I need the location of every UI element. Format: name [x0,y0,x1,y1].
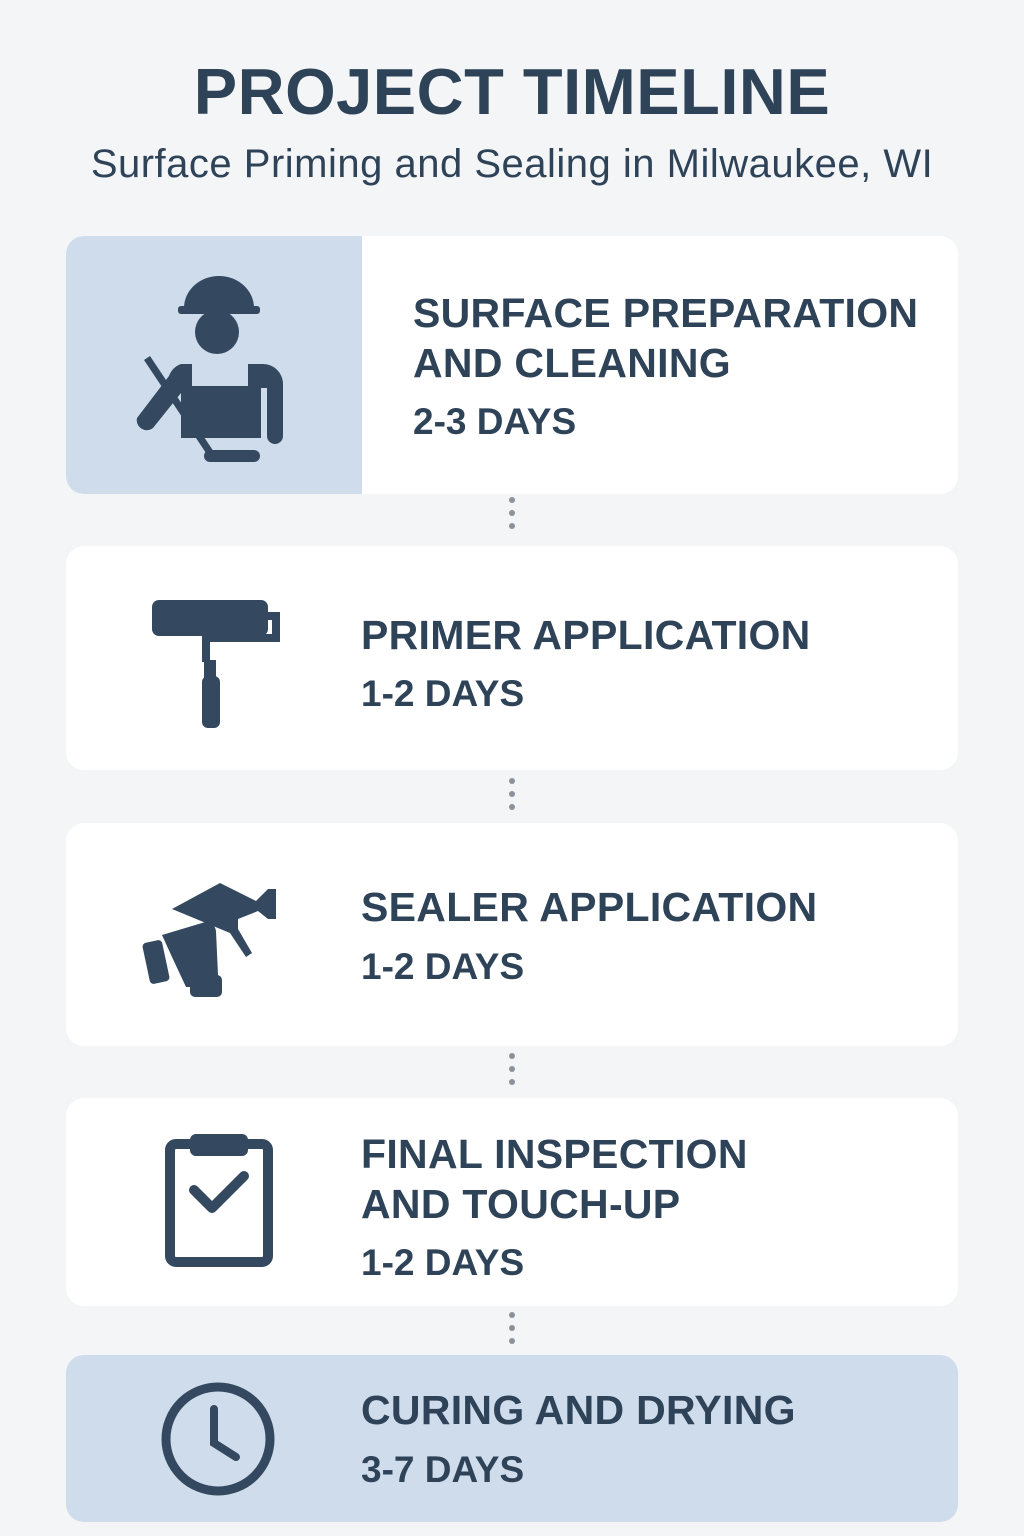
duration: 1-2 DAYS [361,1242,524,1283]
duration: 2-3 DAYS [413,401,576,442]
icon: clock [162,1382,274,1496]
panel: primer [66,546,958,770]
connector dots [509,1053,515,1085]
panel: curing [66,1355,958,1522]
icon: spray gun hand [142,883,276,997]
connector dots [509,1312,515,1344]
heading: PRIMER APPLICATION [361,612,811,658]
heading: AND TOUCH-UP [361,1181,680,1227]
heading: SEALER APPLICATION [361,884,817,930]
heading [413,290,918,386]
icon panel: worker [66,236,362,494]
duration: 1-2 DAYS [361,673,524,714]
heading: AND CLEANING [413,340,731,386]
duration: 1-2 DAYS [361,946,524,987]
title: PROJECT TIMELINE [194,55,830,128]
heading: FINAL INSPECTION [361,1131,748,1177]
heading [361,1131,748,1227]
panel: sealer [66,823,958,1046]
heading: CURING AND DRYING [361,1387,796,1433]
panel: surface preparation [66,236,958,494]
duration: 3-7 DAYS [361,1449,524,1490]
heading: SURFACE PREPARATION [413,290,918,336]
connector dots [509,497,515,529]
panel: final inspection [66,1098,958,1306]
subtitle: Surface Priming and Sealing in Milwaukee, WI [91,142,933,186]
connector dots [509,778,515,810]
icon: clipboard [165,1134,273,1267]
icon: paint roller [152,600,280,728]
